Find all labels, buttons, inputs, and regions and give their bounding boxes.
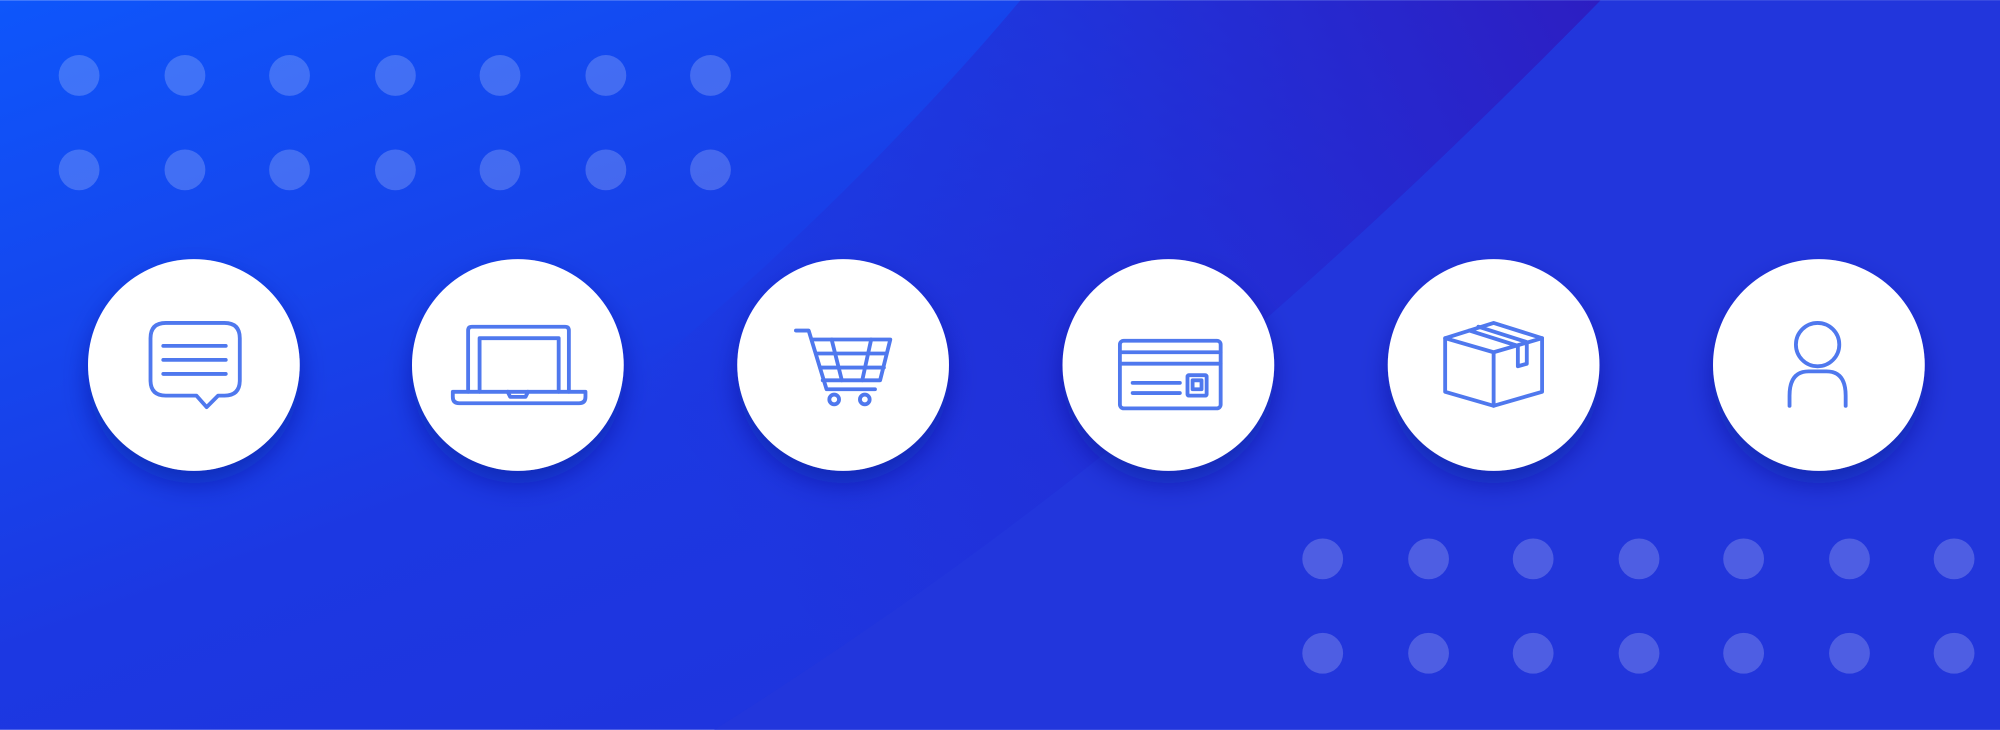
step 3: shopping cart icon circle <box>737 259 949 471</box>
step 2: laptop icon circle <box>412 259 624 471</box>
icon: person <box>1790 323 1846 406</box>
step 4: payment card icon circle <box>1062 259 1274 471</box>
icon: chat bubble <box>151 323 240 407</box>
step 5: package icon circle <box>1388 259 1599 471</box>
icon: laptop <box>453 327 585 403</box>
step 1: chat icon circle <box>88 259 300 471</box>
icon: cart <box>796 331 890 404</box>
dots: top-left grid <box>59 55 731 190</box>
dots: bottom-right grid <box>1302 538 1974 674</box>
icon: box <box>1445 323 1542 406</box>
step 6: user icon circle <box>1713 259 1925 471</box>
icon: credit card <box>1120 341 1221 408</box>
